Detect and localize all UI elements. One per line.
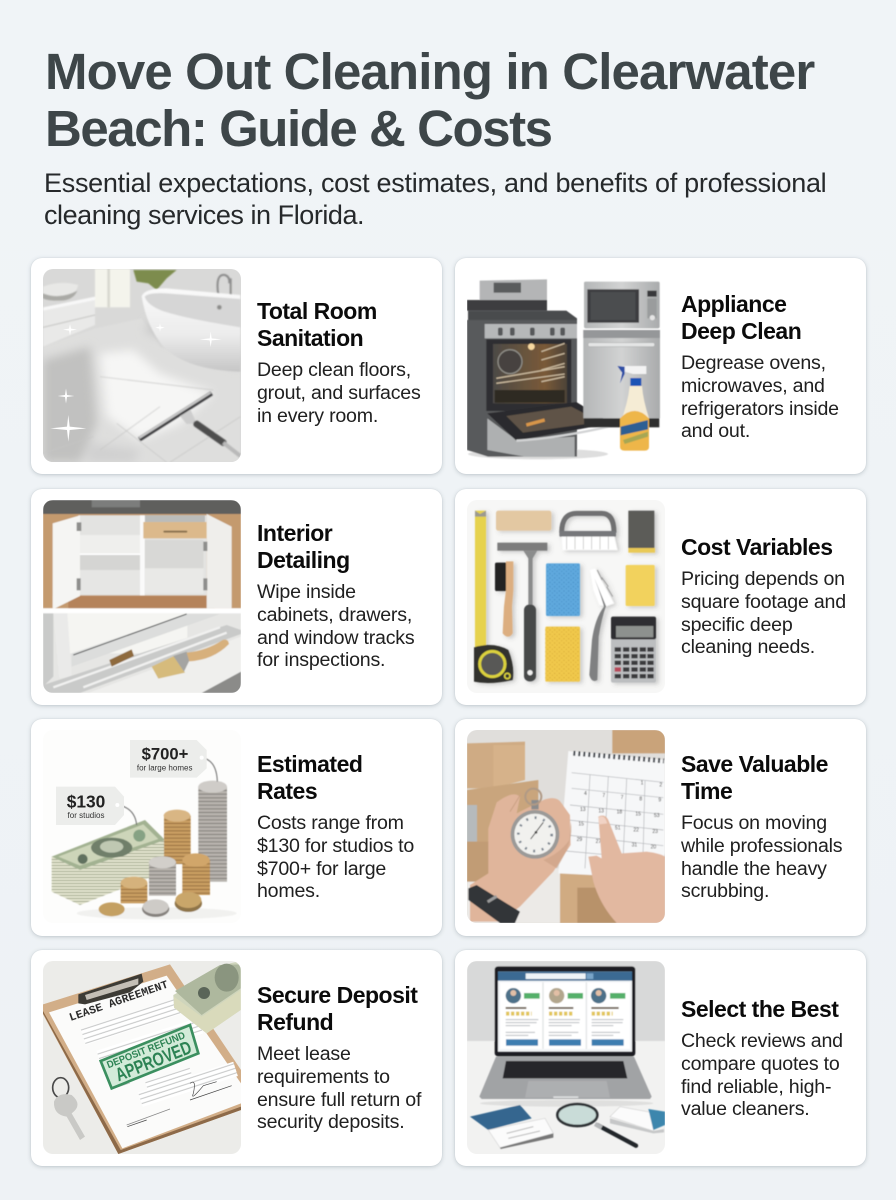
heading: Detailing: [257, 547, 350, 573]
image: stopwatch and calendar: 22: [633, 828, 639, 834]
description: for inspections.: [257, 649, 385, 671]
image: stopwatch and calendar: 15: [635, 812, 641, 818]
description: cabinets, drawers,: [257, 604, 412, 626]
panel: interior detailing: [31, 489, 442, 705]
image: stopwatch and calendar: 13: [598, 808, 604, 814]
image: stopwatch and calendar: 18: [617, 810, 622, 816]
approval stamp text: APPROVED: [112, 1036, 194, 1085]
description: grout, and surfaces: [257, 382, 421, 404]
heading: Time: [681, 778, 732, 804]
image: stopwatch and calendar: 1: [641, 780, 644, 786]
description: [681, 812, 842, 902]
description: cleaning needs.: [681, 636, 815, 658]
image: stopwatch and calendar: 9: [658, 798, 661, 804]
image: stopwatch and calendar: 31: [632, 842, 637, 848]
description: microwaves, and: [681, 375, 825, 397]
description: $130 for studios to: [257, 835, 414, 857]
heading: Select the Best: [681, 996, 838, 1022]
heading: Total Room: [257, 298, 377, 324]
approval stamp text: DEPOSIT REFUND: [105, 1030, 187, 1071]
description: security deposits.: [257, 1111, 404, 1133]
heading: Deep Clean: [681, 318, 801, 344]
heading: Appliance: [681, 291, 786, 317]
description: and window tracks: [257, 627, 414, 649]
description: [257, 1043, 422, 1133]
panel: total room sanitation: [31, 258, 442, 474]
subtitle: Essential expectations, cost estimates, and benefits of professional: [44, 168, 826, 198]
description: homes.: [257, 880, 320, 902]
heading: [257, 520, 350, 573]
description: Meet lease: [257, 1043, 351, 1065]
description: compare quotes to: [681, 1053, 840, 1075]
price tag: $130: [56, 787, 124, 825]
description: [681, 1030, 843, 1120]
description: value cleaners.: [681, 1098, 810, 1120]
price tag: $700+: [130, 740, 207, 778]
image: stopwatch and calendar: 51: [615, 826, 621, 832]
description: specific deep: [681, 614, 793, 636]
description: Degrease ovens,: [681, 352, 826, 374]
description: find reliable, high-: [681, 1076, 831, 1098]
text block: [257, 298, 421, 427]
image: money stacks with price tags: [51, 740, 236, 920]
title: Move Out Cleaning in Clearwater: [45, 43, 814, 100]
image: lease agreement clipboard: [43, 961, 241, 1154]
description: in every room.: [257, 405, 378, 427]
panel: estimated rates: [31, 719, 442, 936]
description: Focus on moving: [681, 812, 827, 834]
price tag: $700+: for large homes: [137, 764, 192, 773]
image: oven, microwave and spray bottle: [467, 278, 661, 460]
description: Check reviews and: [681, 1030, 843, 1052]
heading: Rates: [257, 778, 317, 804]
description: and out.: [681, 420, 750, 442]
image: bathroom with squeegee: [43, 269, 241, 462]
description: [681, 352, 839, 442]
heading: [257, 982, 418, 1035]
image: stopwatch and calendar: 4: [584, 791, 587, 797]
heading: [257, 751, 362, 804]
image: stopwatch and calendar: 2: [659, 782, 662, 788]
heading: Refund: [257, 1009, 333, 1035]
title: Beach: Guide & Costs: [45, 100, 552, 157]
heading: Estimated: [257, 751, 362, 777]
image: open cabinet and window track: [43, 500, 241, 693]
panel: appliance deep clean: [455, 258, 866, 474]
image: stopwatch and calendar: 7: [602, 793, 605, 799]
heading: Sanitation: [257, 325, 363, 351]
image: stopwatch and calendar: 23: [652, 829, 658, 835]
image: stopwatch and calendar: 7: [621, 795, 624, 801]
image: stopwatch and calendar: 13: [580, 807, 586, 813]
approval stamp text: [105, 1030, 194, 1087]
panel: save valuable time: [455, 719, 866, 936]
description: $700+ for large: [257, 858, 386, 880]
description: [257, 581, 414, 671]
image: stopwatch and calendar: 29: [577, 837, 582, 843]
heading: [681, 291, 801, 344]
image: stopwatch and calendar: 27: [596, 839, 601, 845]
text block: [681, 534, 846, 658]
text block: [681, 291, 839, 442]
description: Pricing depends on: [681, 568, 845, 590]
text block: [257, 751, 414, 902]
description: [681, 568, 846, 658]
description: [257, 812, 414, 902]
description: scrubbing.: [681, 880, 769, 902]
description: while professionals: [681, 835, 842, 857]
description: Costs range from: [257, 812, 404, 834]
image: stopwatch and calendar: [467, 730, 665, 923]
description: handle the heavy: [681, 858, 827, 880]
description: ensure full return of: [257, 1089, 421, 1111]
panel: select the best: [455, 950, 866, 1166]
description: Wipe inside: [257, 581, 356, 603]
heading: Interior: [257, 520, 332, 546]
image: stopwatch and calendar: 20: [651, 844, 656, 850]
text block: [257, 982, 422, 1133]
panel: cost variables: [455, 489, 866, 705]
heading: Cost Variables: [681, 534, 833, 560]
text block: [681, 751, 842, 902]
description: refrigerators inside: [681, 398, 839, 420]
title: [45, 43, 814, 157]
subtitle: [44, 168, 826, 230]
image: stopwatch and calendar: 53: [654, 813, 660, 819]
heading: [257, 298, 377, 351]
price tag: $130: $130: [67, 791, 105, 811]
description: [257, 359, 421, 427]
text block: [681, 996, 843, 1120]
heading: Save Valuable: [681, 751, 828, 777]
text block: [257, 520, 414, 671]
image: stopwatch and calendar: 8: [639, 796, 642, 802]
description: square footage and: [681, 591, 846, 613]
heading: Secure Deposit: [257, 982, 417, 1008]
image: cleaning tools flat lay: [467, 500, 665, 693]
subtitle: cleaning services in Florida.: [44, 200, 364, 230]
price tag: $130: for studios: [68, 811, 104, 820]
panel: secure deposit refund: [31, 950, 442, 1166]
description: requirements to: [257, 1066, 390, 1088]
price tag: $700+: $700+: [142, 745, 189, 764]
description: Deep clean floors,: [257, 359, 411, 381]
image: stopwatch and calendar: 15: [578, 822, 584, 828]
image: laptop showing reviews with magnifier: [467, 961, 665, 1154]
heading: [681, 751, 828, 804]
lease heading: LEASE AGREEMENT: [68, 980, 170, 1025]
